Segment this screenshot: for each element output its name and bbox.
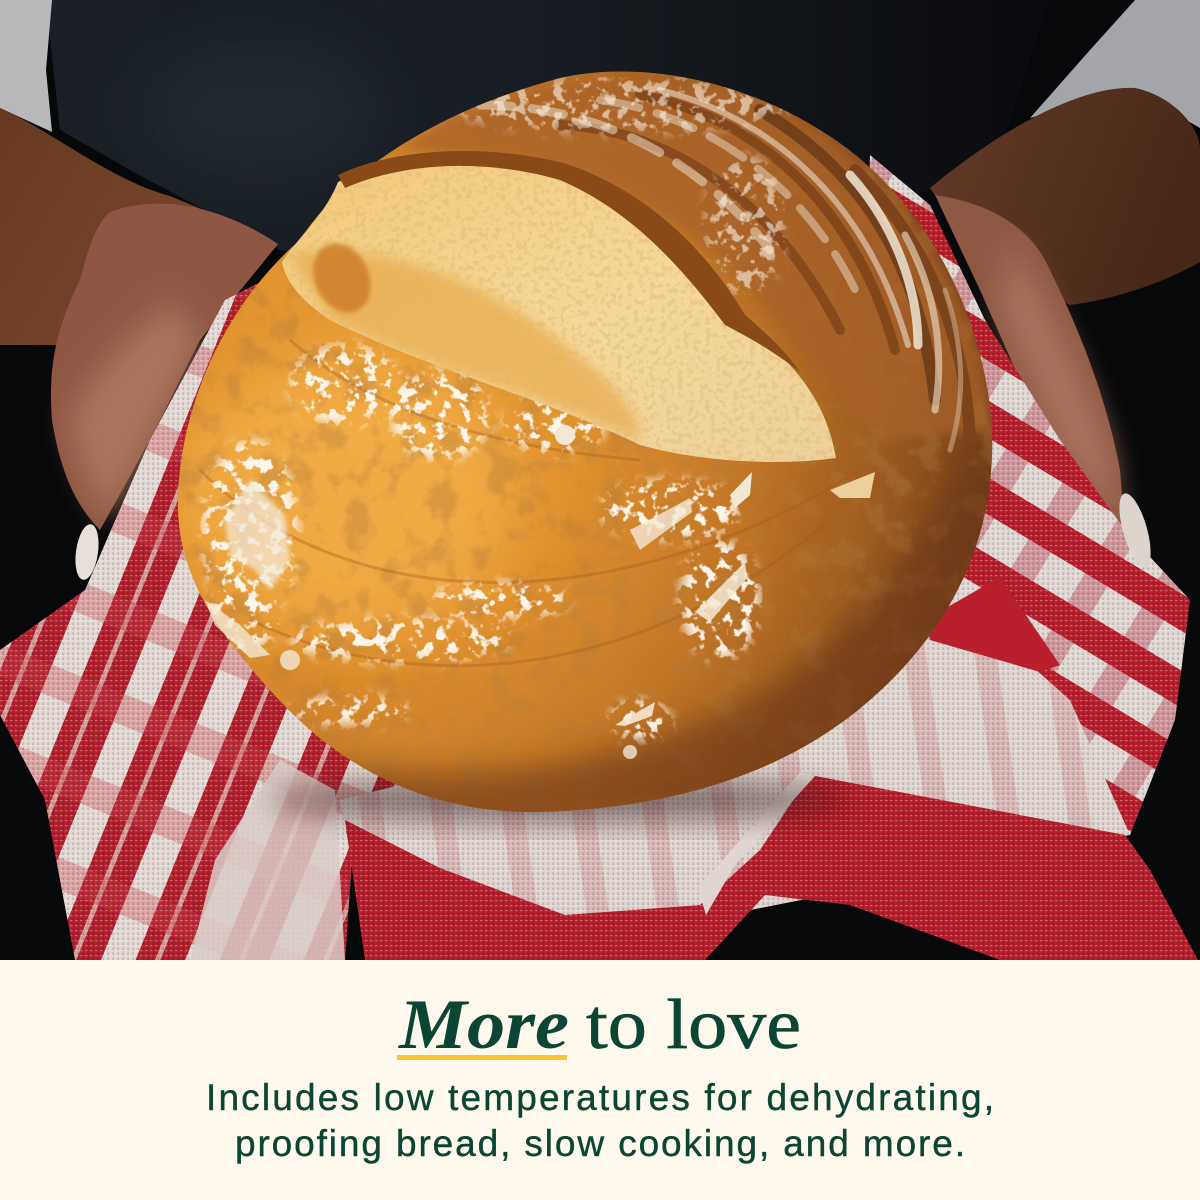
left arm (0, 108, 202, 345)
crust (178, 71, 992, 812)
body text: proofing bread, slow cooking, and more. (235, 1123, 965, 1164)
golden crust glow (170, 370, 510, 630)
title: More (398, 986, 569, 1064)
left hand (51, 204, 278, 530)
towel bottom red hem (345, 775, 1198, 960)
towel left section (0, 282, 398, 960)
lower sweeping score lines (199, 339, 781, 668)
title: to love (586, 986, 801, 1064)
body text: Includes low temperatures for dehydrating, (206, 1077, 994, 1118)
flour patches (205, 425, 875, 759)
lower dark crust (339, 462, 992, 812)
open crumb under scored ear (282, 156, 836, 462)
crumb toast glow (290, 252, 640, 440)
crust mottling (178, 72, 992, 762)
dark background (0, 0, 1200, 960)
towel centre white panel (340, 638, 1130, 915)
towel hem white band (698, 772, 815, 915)
crumb holes texture (280, 150, 840, 470)
towel: red gingham cloth (0, 155, 1198, 960)
brown patch on crumb (311, 241, 372, 314)
flour speckle regions (195, 345, 760, 740)
photo: hands holding sourdough loaf (0, 0, 1200, 960)
caption panel (0, 960, 1200, 1200)
towel right section (860, 155, 1190, 835)
right arm (930, 88, 1200, 305)
right sleeve (1030, 0, 1200, 128)
left sleeve (0, 0, 52, 132)
ear dark edge (338, 151, 800, 372)
right thumb nail (1119, 493, 1151, 566)
towel centre red band (925, 577, 1060, 672)
upper crust tone (400, 81, 992, 440)
left thumb nail (75, 524, 99, 580)
flour on upper crust (450, 77, 790, 295)
right hand (935, 195, 1125, 535)
scored ribs on upper right (480, 90, 970, 450)
shadow under loaf (270, 778, 850, 822)
loaf of bread (170, 60, 1010, 840)
towel lower left pale corner (190, 760, 345, 960)
apron (50, 0, 949, 251)
title (398, 986, 801, 1064)
body text (206, 1077, 994, 1164)
title underline (397, 1055, 567, 1060)
